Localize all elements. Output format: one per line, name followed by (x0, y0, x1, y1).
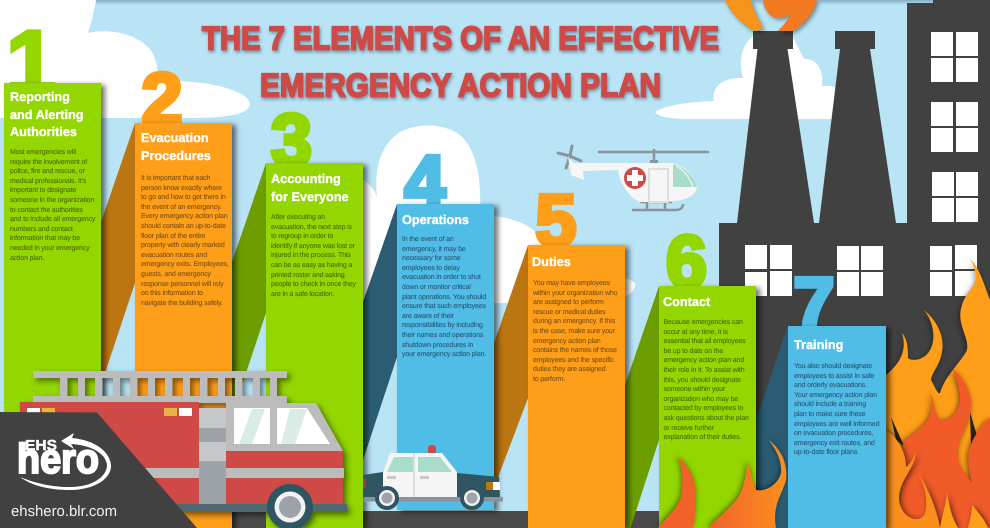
text: panel 7: Your emergency action plan (794, 392, 877, 399)
text: panel 6: their role in it. To assist with (664, 367, 744, 374)
text: panel 6: occur at any time, it is (664, 329, 728, 336)
text: panel 5: during an emergency. If this (533, 318, 615, 325)
text: panel 4: down or monitor critical (402, 284, 471, 291)
text: panel 1: information that may be (10, 235, 80, 242)
text: panel 6: Because emergencies can (664, 319, 743, 326)
text: panel 3: identify if anyone was lost or (271, 243, 355, 250)
text: panel 6: ask questions about the plan (664, 415, 749, 422)
text: panel 4: your emergency action plan. (402, 351, 486, 358)
text: panel 2: evacuation routes and (141, 252, 207, 259)
text: panel 1: medical professionals. It's (10, 178, 86, 185)
text: panel 5: is the case, make sure your (533, 328, 615, 335)
text: panel 6: someone within your (664, 386, 725, 393)
text: panel 4: employees to delay (402, 265, 460, 272)
text: panel 2 (141, 174, 229, 307)
heading: panel 2: Procedures (141, 149, 211, 163)
text: panel 3: people to check in once they (271, 281, 356, 288)
numerals 1-7: 3 (271, 98, 312, 182)
text: panel 5: You may have employees (533, 280, 610, 287)
text: panel 7: emergency exit routes, and (794, 440, 875, 447)
text: panel 1: to contact the authorities (10, 207, 83, 214)
numerals 1-7: 7 (793, 262, 835, 345)
panel: 4 operations (397, 204, 494, 510)
text: panel 2: floor plan of the entire (141, 233, 205, 240)
text: panel 6: essential that all employees (664, 338, 746, 345)
text: panel 7: and orderly evacuations. (794, 382, 867, 389)
text: panel 4: plant operations. You should (402, 294, 486, 301)
logo wordmark: EHS (25, 438, 57, 454)
text: panel 1 (10, 148, 96, 262)
panel: 6 contact (659, 286, 756, 528)
text: panel 1: needed in your emergency (10, 245, 90, 252)
text: panel 6: be up to date on the (664, 348, 723, 355)
text: panel 3: injured in the process. This (271, 252, 351, 259)
text: panel 2: navigate the building safely. (141, 300, 223, 307)
text: panel 3: After executing an (271, 214, 325, 221)
text: panel 5: contains the names of those (533, 347, 617, 354)
text: panel 1: numbers and contact (10, 226, 73, 233)
car wheels (375, 486, 484, 510)
heading: panel 6: Contact (663, 295, 710, 309)
heading: panel 1: Authorities (10, 125, 77, 139)
text: panel 2: to go and how to get there in (141, 194, 226, 201)
heading: panel 1: and Alerting (10, 108, 84, 122)
text: panel 6: emergency action plan and (664, 357, 744, 364)
heading: panel 7: Training (794, 338, 843, 352)
panel: 1 reporting and alerting authorities (4, 83, 101, 528)
title: THE 7 ELEMENTS OF AN EFFECTIVE (202, 20, 719, 56)
logo url: ehshero.blr.com (11, 503, 117, 520)
panel: 3 accounting for everyone (266, 163, 363, 528)
text: panel 7: You also should designate (794, 363, 872, 370)
text: panel 5: are assigned to perform (533, 299, 604, 306)
heading: panel 5: Duties (532, 255, 571, 269)
text: panel 2: person know exactly where (141, 185, 222, 192)
text: panel 4: ensure that such employees (402, 303, 486, 310)
text: panel 5: to perform. (533, 376, 565, 383)
heading: panel 4: Operations (402, 213, 469, 227)
text: panel 2: the event of an emergency. (141, 204, 222, 211)
text: panel 7: should include a training (794, 401, 866, 408)
numerals 1-7: 6 (666, 220, 707, 303)
text: panel 1: require the involvement of (10, 159, 87, 166)
text: panel 4 (402, 236, 486, 358)
text: panel 6: explanation of their duties. (664, 434, 741, 441)
title: EMERGENCY ACTION PLAN (260, 66, 661, 104)
text: panel 6: contacted by employees to (664, 405, 743, 412)
text: panel 2: It is important that each (141, 175, 210, 182)
heading: panel 3 (271, 172, 349, 204)
numerals 1-7: 5 (535, 179, 577, 262)
text: panel 2: should contain an up-to-date (141, 223, 226, 230)
text: panel 3: can be as easy as having a (271, 262, 352, 269)
text: panel 1: important to designate (10, 187, 76, 194)
panel: 5 duties (528, 245, 625, 528)
text: panel 5: within your organization who (533, 290, 617, 297)
text: panel 1: action plan. (10, 255, 44, 262)
text: panel 5: duties they are assigned (533, 366, 606, 373)
truck body (20, 402, 347, 512)
text: panel 3 (271, 214, 356, 298)
text: panel 4: In the event of an (402, 236, 454, 243)
text: panel 4: necessary for some (402, 255, 461, 262)
truck ladder (33, 371, 287, 403)
numerals 1-7: 2 (141, 58, 183, 140)
text: panel 4: evacuation in order to shut (402, 274, 481, 281)
text: panel 7: employees are well informed (794, 421, 879, 428)
heading: panel 3: Accounting (271, 172, 341, 186)
text: panel 5: rescue or medical duties (533, 309, 606, 316)
text: panel 5: emergency action plan (533, 338, 600, 345)
heading: panel 1 (10, 90, 84, 139)
text: panel 4: emergency, it may be (402, 246, 466, 253)
text: panel 7 (794, 362, 880, 456)
text: panel 6: or receive further (664, 425, 714, 432)
numerals 1-7: 1 (6, 13, 56, 113)
text: panel 1: and to include all emergency (10, 216, 95, 223)
text: panel 2: response personnel will rely (141, 281, 223, 288)
text: panel 1: Most emergencies will (10, 149, 76, 156)
text: panel 3: evacuation, the next step is (271, 224, 352, 231)
logo wordmark: hero (17, 435, 99, 482)
text: panel 4: responsibilities by including (402, 322, 483, 329)
text: panel 3: printed roster and asking (271, 272, 345, 279)
text: panel 4: their names and operations (402, 332, 483, 339)
text: panel 7: plan to make sure these (794, 411, 866, 418)
text: panel 2: Every emergency action plan (141, 213, 228, 220)
text: panel 7: employees to assist in safe (794, 373, 874, 380)
truck wheel (267, 484, 313, 528)
text: panel 7: up-to-date floor plans. (794, 449, 859, 456)
heading: panel 1: Reporting (10, 90, 70, 104)
heading: panel 2 (141, 131, 211, 163)
text: panel 6 (664, 318, 749, 441)
text: panel 7: on evacuation procedures, (794, 430, 873, 437)
text: panel 5 (533, 280, 618, 383)
numerals 1-7: 4 (404, 140, 446, 223)
text: panel 4: are aware of their (402, 313, 454, 320)
text: panel 2: emergency exits. Employees, (141, 261, 229, 268)
text: panel 4: shutdown procedures in (402, 342, 473, 349)
panel: 2 evacuation procedures (135, 123, 232, 528)
text: panel 5: employees and the specific (533, 357, 614, 364)
heading: panel 3: for Everyone (271, 190, 349, 204)
text: panel 6: this, you should designate (664, 377, 741, 384)
text: panel 1: police, fire and rescue, or (10, 168, 85, 175)
text: panel 6: organization who may be (664, 396, 738, 403)
text: panel 2: on this information to (141, 290, 203, 297)
text: panel 2: property with clearly marked (141, 242, 225, 249)
text: panel 3: to regroup in order to (271, 233, 333, 240)
text: panel 1: someone in the organization (10, 197, 94, 204)
text: panel 2: guests, and emergency (141, 271, 211, 278)
panel: 7 training (788, 326, 886, 528)
heading: panel 2: Evacuation (141, 131, 209, 145)
text: panel 3: are in a safe location. (271, 291, 334, 298)
